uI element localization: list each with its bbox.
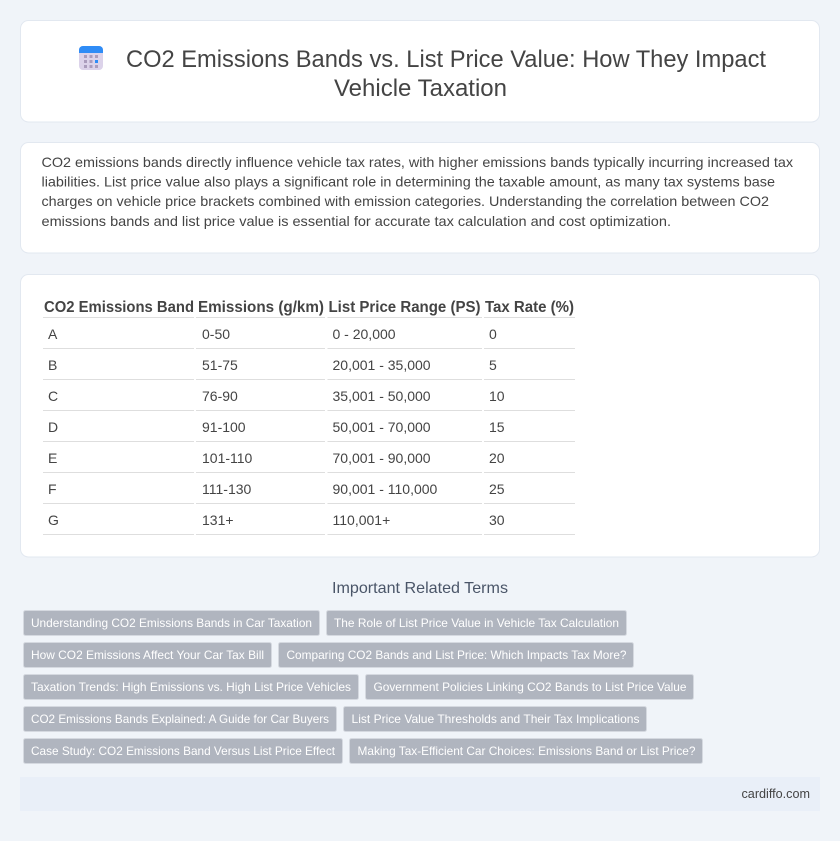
table row: band A: A [48,326,58,342]
footer [20,777,820,811]
intro paragraph: emissions bands and list price value is essential for accurate tax calculation and cost optimization. [42,213,671,229]
tag 9 [24,738,342,764]
table row: band B: B [48,357,57,373]
table row: band E: 20 [489,450,505,466]
tag 5 [24,674,358,700]
table row: band G: 30 [489,512,505,528]
table row: band B: 51-75 [202,357,238,373]
panel: intro text [20,142,820,253]
title: Vehicle Taxation [334,75,507,102]
table row: band C: 10 [489,388,505,404]
table row: band D: 91-100 [202,419,246,435]
table row: band E: E [48,450,57,466]
footer: cardiffo.com [742,787,810,801]
table row: band D: 50,001 - 70,000 [332,419,431,435]
tag 6 [366,674,694,700]
intro paragraph: liabilities. List price value also plays a significant role in determining the taxable amount, as many tax systems base [42,174,775,190]
table row: band D: 15 [489,419,505,435]
tag 4: Comparing CO2 Bands and List Price: Which Impacts Tax More? [286,648,627,662]
table row: band C [48,388,505,404]
tag 8 [344,706,646,732]
tag 9: Case Study: CO2 Emissions Band Versus List Price Effect [31,744,336,758]
title: CO2 Emissions Bands vs. List Price Value: How They Impact [126,46,766,73]
table row: band C: 76-90 [202,388,238,404]
table row: band B: 20,001 - 35,000 [332,357,431,373]
tag 5: Taxation Trends: High Emissions vs. High List Price Vehicles [31,680,351,694]
table row: band C: C [48,388,58,404]
heading: related terms: Important Related Terms [332,580,508,597]
table row: band G: 131+ [202,512,234,528]
tag 4 [278,642,634,668]
tag 8: List Price Value Thresholds and Their Tax Implications [352,712,640,726]
tag 3 [24,642,272,668]
table rules [43,318,575,534]
table header [44,299,574,316]
tag 10 [350,738,702,764]
table row: band F: F [48,481,57,497]
tag 7: CO2 Emissions Bands Explained: A Guide for Car Buyers [31,712,329,726]
table row: band A: 0-50 [202,326,230,342]
table row: band C: 35,001 - 50,000 [332,388,431,404]
table row: band G: 110,001+ [332,512,390,528]
table row: band B [48,357,497,373]
table row: band G: G [48,512,59,528]
table row: band F [48,481,505,497]
intro paragraph: charges on vehicle price brackets combined with emission categories. Understanding the correlation between CO2 [42,193,769,209]
tag 3: How CO2 Emissions Affect Your Car Tax Bill [31,648,264,662]
table row: band G [48,512,505,528]
table row: band F: 90,001 - 110,000 [332,481,438,497]
table row: band D: D [48,419,58,435]
icon: calendar [79,46,103,70]
table row: band F: 111-130 [202,481,252,497]
panel: header [20,20,820,122]
table row: band F: 25 [489,481,505,497]
title [126,46,766,102]
table header: List Price Range (PS) [328,299,480,316]
tag 1: Understanding CO2 Emissions Bands in Car Taxation [31,616,312,630]
table row: band E [48,450,505,466]
table row: band A: 0 - 20,000 [332,326,396,342]
tag 6: Government Policies Linking CO2 Bands to List Price Value [374,680,687,694]
table row: band E: 70,001 - 90,000 [332,450,431,466]
tag 1 [24,610,320,636]
table header: Tax Rate (%) [485,299,574,316]
table row: band A: 0 [489,326,497,342]
related term tags [24,610,702,764]
tag 7 [24,706,336,732]
table header: Emissions (g/km) [198,299,324,316]
table row: band D [48,419,505,435]
intro paragraph [42,154,793,229]
table row: band B: 5 [489,357,497,373]
table row: band A [48,326,497,342]
intro paragraph: CO2 emissions bands directly influence vehicle tax rates, with higher emissions bands typically incurring increased tax [42,154,793,170]
table row: band E: 101-110 [202,450,253,466]
tag 2: The Role of List Price Value in Vehicle Tax Calculation [334,616,619,630]
tag 2 [326,610,626,636]
table header: CO2 Emissions Band [44,299,194,316]
tag 10: Making Tax-Efficient Car Choices: Emissions Band or List Price? [358,744,696,758]
panel: tax table [20,274,820,557]
